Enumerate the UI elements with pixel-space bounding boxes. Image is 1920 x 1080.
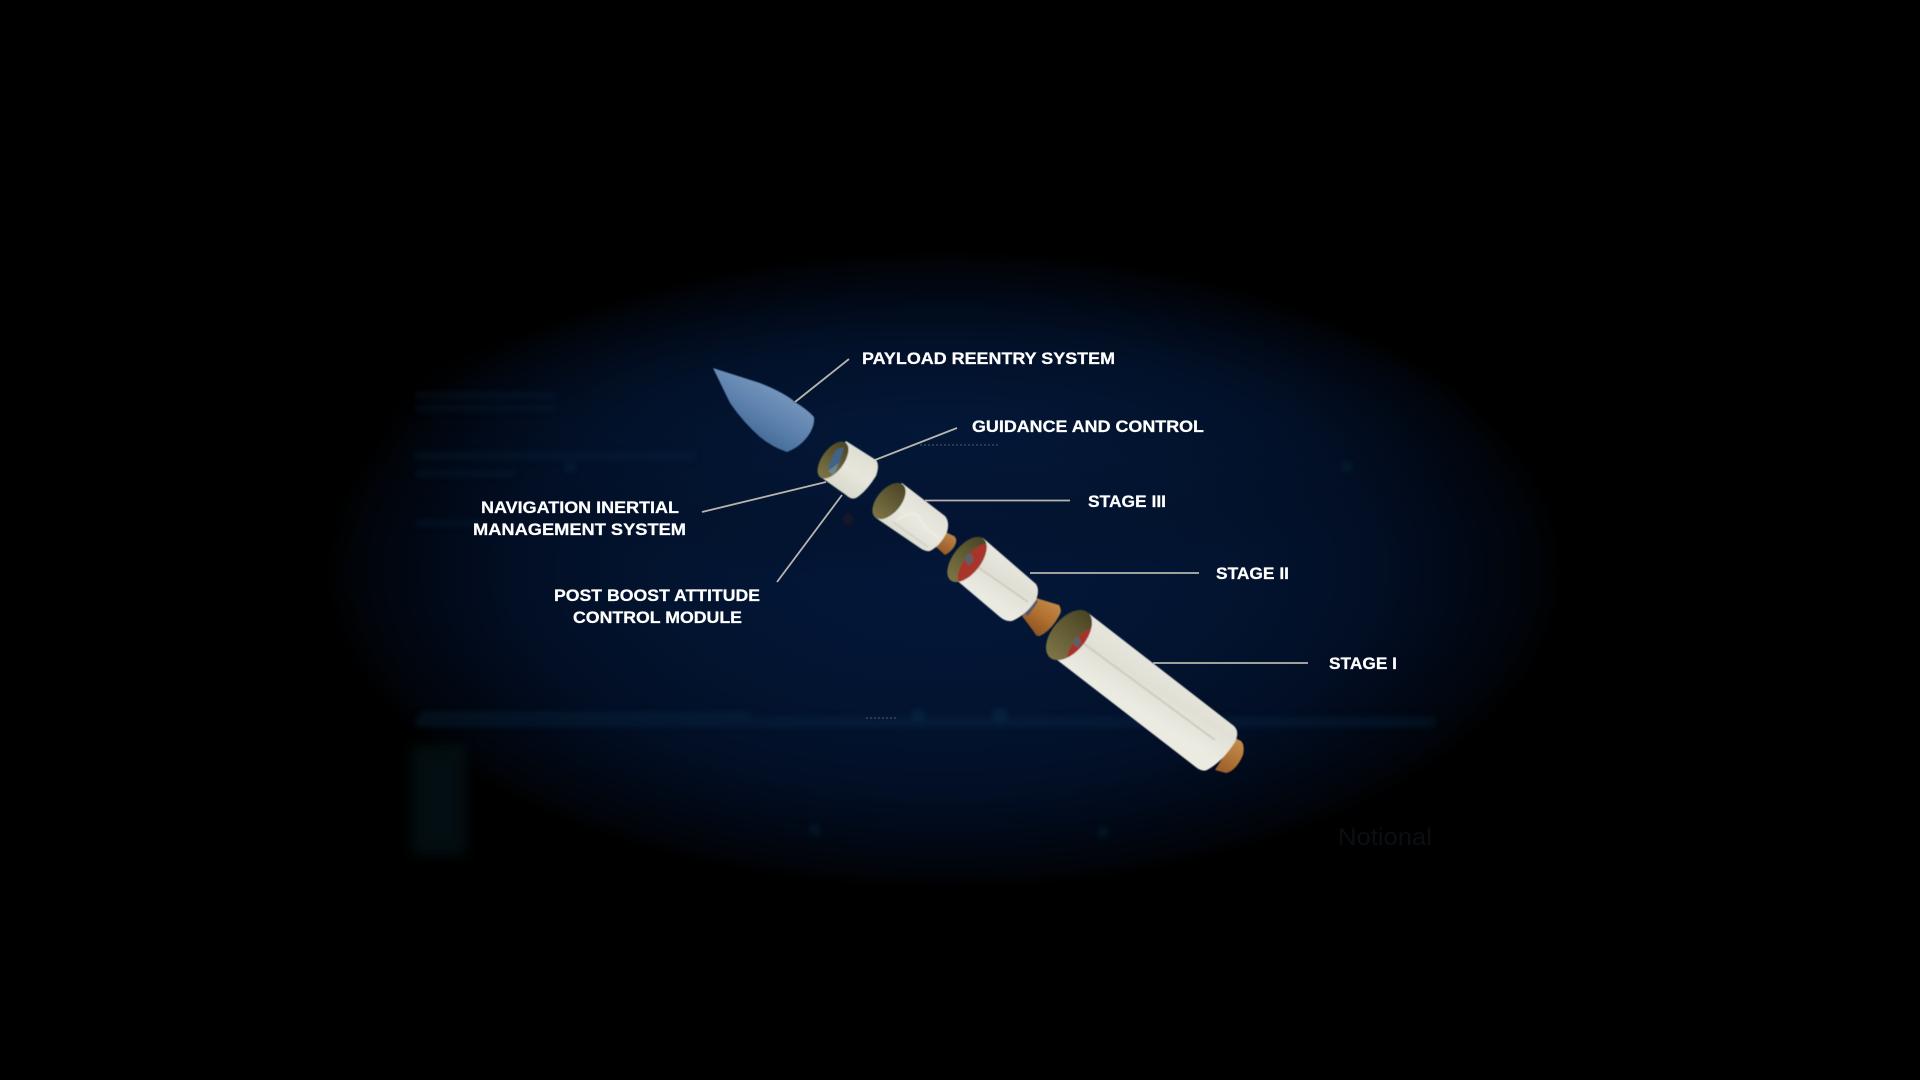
- faint data texture: [412, 392, 1435, 855]
- stage I body: [1037, 601, 1237, 771]
- stage II body: [940, 530, 1038, 621]
- guidance and control section: [817, 440, 879, 500]
- stage II nozzle: [1022, 598, 1061, 636]
- payload reentry nose cone: [713, 368, 814, 452]
- label: navigation inertial management system: MANAGEMENT SYSTEM: [473, 520, 686, 539]
- label: post boost attitude control module: POST BOOST ATTITUDE: [554, 586, 760, 605]
- label: payload reentry system: PAYLOAD REENTRY SYSTEM: [862, 349, 1115, 368]
- notional watermark: Notional: [1338, 824, 1432, 851]
- stage I nozzle: [1215, 738, 1244, 773]
- labels: [473, 349, 1397, 673]
- label: stage II: STAGE II: [1216, 564, 1289, 583]
- label: stage III: STAGE III: [1088, 492, 1166, 511]
- label: guidance and control: GUIDANCE AND CONTROL: [972, 417, 1204, 436]
- label: post boost attitude control module: CONTROL MODULE: [573, 608, 742, 627]
- stage III body: [866, 477, 948, 551]
- stage III nozzle: [935, 531, 956, 555]
- label: stage I: STAGE I: [1329, 654, 1397, 673]
- label: navigation inertial management system: NAVIGATION INERTIAL: [481, 498, 679, 517]
- rocket: exploded stages: [713, 368, 1244, 773]
- infographic: exploded missile diagram: [354, 264, 1537, 876]
- label: navigation inertial management system: [473, 498, 686, 539]
- label: post boost attitude control module: [554, 586, 760, 627]
- leader lines: [702, 359, 1308, 663]
